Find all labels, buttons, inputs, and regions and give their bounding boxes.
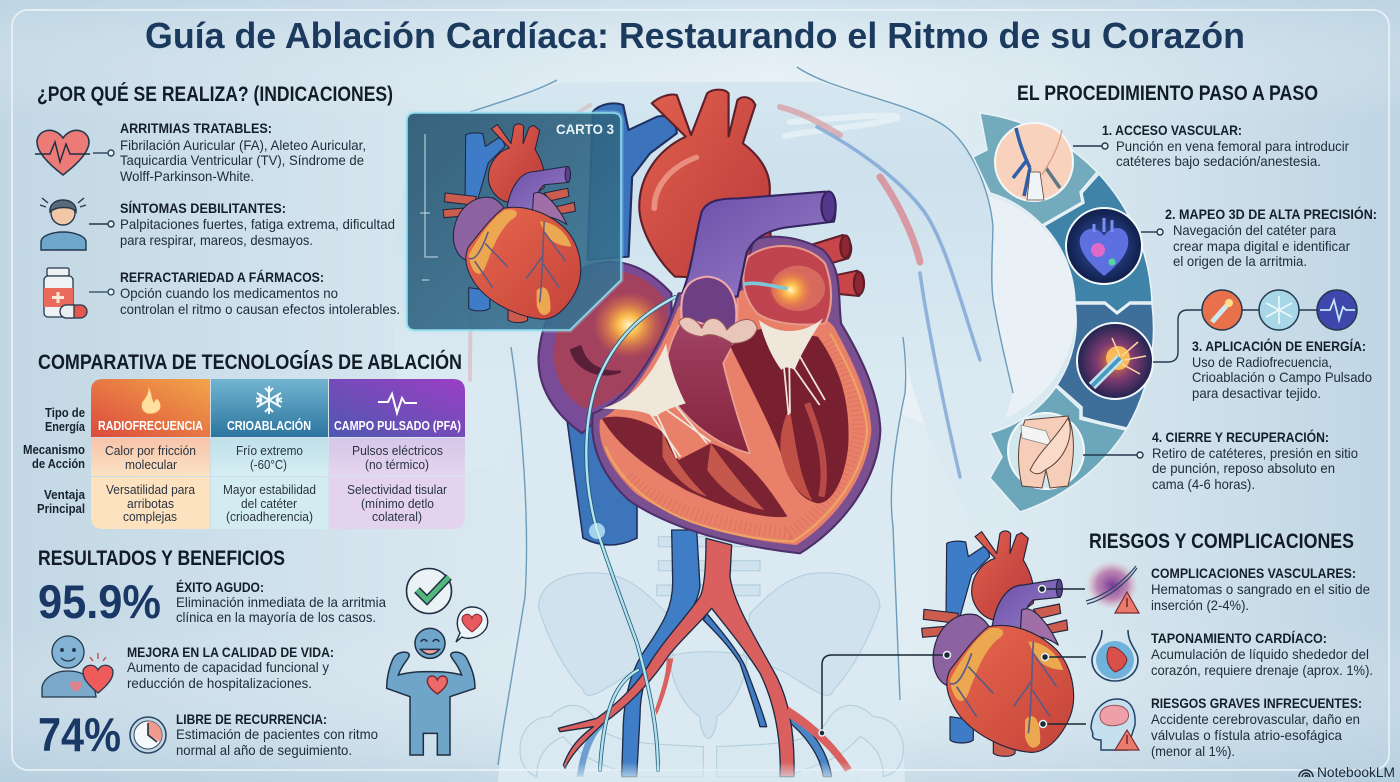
text: vasculares: Hematomas o sangrado en el sitio de	[1151, 581, 1370, 597]
column: radiofrecuencia: Versatilidad para	[106, 483, 195, 497]
text: el origen de la arritmia.	[1173, 253, 1307, 269]
lower vena cava	[567, 420, 637, 545]
column: radiofrecuencia: RADIOFRECUENCIA	[98, 419, 203, 433]
pelvis and spine	[520, 537, 903, 777]
pulmonary root opening	[681, 277, 736, 337]
heart callout connectors	[819, 586, 1086, 736]
text: refractariedad	[120, 269, 400, 317]
title: Guía de Ablación Cardíaca: Restaurando el Ritmo de su Corazón	[145, 15, 1245, 56]
text: sintomas: Palpitaciones fuertes, fatiga extrema, dificultad	[120, 216, 395, 232]
text: taponamiento: corazón, requiere drenaje (aprox. 1%).	[1151, 662, 1373, 678]
column: campo pulsado: (no térmico)	[365, 458, 429, 472]
icon: catheter energy	[1077, 323, 1153, 399]
text: calidad de vida: reducción de hospitalizaciones.	[127, 675, 312, 691]
heading: RIESGOS Y COMPLICACIONES	[1089, 530, 1354, 553]
text: crear mapa digital e identificar	[1173, 238, 1350, 254]
connector and energy icons	[1153, 290, 1357, 362]
text: taponamiento: Acumulación de líquido shededor del	[1151, 646, 1369, 662]
column: radiofrecuencia: arribotas	[127, 497, 174, 511]
text	[1192, 337, 1372, 401]
heading: RESULTADOS Y BENEFICIOS	[38, 547, 285, 570]
text: exito agudo: ÉXITO AGUDO:	[176, 579, 264, 595]
text: cama (4-6 horas).	[1152, 476, 1255, 492]
ring inner light area	[840, 192, 1076, 428]
column: crioablacion: CRIOABLACIÓN	[227, 418, 311, 433]
column: crioablacion	[211, 379, 328, 529]
step 2	[1066, 205, 1377, 284]
icon: check mark	[406, 568, 452, 614]
icon: brain with warning	[1091, 699, 1139, 750]
text: riesgos graves: válvulas o fístula atrio-esofágica	[1151, 727, 1342, 743]
descending vessels	[558, 530, 852, 777]
text: libre de recurrencia	[176, 711, 378, 758]
text: vasculares: inserción (2-4%).	[1151, 597, 1249, 613]
icon: smiling person with heart	[42, 636, 113, 697]
text: catéteres bajo sedación/anestesia.	[1116, 153, 1321, 169]
ring segment 4	[990, 387, 1126, 512]
body silhouette with anatomy background	[393, 67, 1013, 782]
text: sintomas: SÍNTOMAS DEBILITANTES:	[120, 200, 286, 216]
text: libre de recurrencia: LIBRE DE RECURRENCIA:	[176, 711, 327, 727]
chordae right	[759, 318, 825, 415]
text: 3. APLICACIÓN DE ENERGÍA:	[1192, 337, 1366, 354]
column: radiofrecuencia: complejas	[123, 510, 177, 524]
icon: clock	[130, 717, 166, 753]
pulmonary artery	[682, 191, 836, 297]
heart outer wall	[592, 237, 880, 553]
heading: COMPARATIVA DE TECNOLOGÍAS DE ABLACIÓN	[38, 350, 462, 374]
text: refractariedad: Opción cuando los medicamentos no	[120, 285, 338, 301]
tip catheter	[745, 283, 786, 288]
valve cusps	[679, 317, 757, 343]
ring segment 2	[1044, 174, 1152, 312]
watermark: NotebookLM: NotebookLM	[1317, 765, 1395, 780]
table row labels: de Acción	[32, 457, 85, 471]
column: campo pulsado: Pulsos eléctricos	[352, 444, 443, 458]
text: calidad de vida: MEJORA EN LA CALIDAD DE VIDA:	[127, 644, 334, 660]
panel: indications	[35, 83, 400, 318]
column: campo pulsado: Selectividad tisular	[347, 483, 447, 497]
connector	[1141, 229, 1163, 235]
ring segment 3	[1057, 304, 1154, 428]
text: refractariedad: REFRACTARIEDAD A FÁRMACOS:	[120, 269, 324, 285]
ring segment 1	[973, 113, 1097, 225]
text: arritmias: Wolff-Parkinson-White.	[120, 168, 254, 184]
connector	[1083, 452, 1143, 458]
text: exito agudo: Eliminación inmediata de la arritmia	[176, 594, 386, 610]
text: sintomas: para respirar, mareos, desmayos.	[120, 232, 313, 248]
text: 1. ACCESO VASCULAR:	[1102, 122, 1242, 138]
inset: CARTO 3 mapping panel	[407, 113, 621, 330]
icon: groin vascular access	[995, 123, 1073, 201]
column: campo pulsado: CAMPO PULSADO (PFA)	[334, 419, 461, 433]
column: campo pulsado: colateral)	[372, 510, 422, 524]
ablation glow right	[769, 269, 813, 311]
column: radiofrecuencia: molecular	[125, 458, 177, 472]
text: libre de recurrencia: Estimación de pacientes con ritmo	[176, 726, 378, 742]
step 3	[1077, 290, 1372, 401]
outflow column	[666, 293, 750, 453]
table row labels: Principal	[37, 502, 85, 516]
column: crioablacion: (-60°C)	[250, 458, 287, 472]
arm vessels	[470, 105, 980, 477]
column: crioablacion: (crioadherencia)	[226, 510, 313, 524]
icon: medicine bottle	[44, 268, 114, 318]
panel: risks	[819, 530, 1373, 759]
heading: EL PROCEDIMIENTO PASO A PASO	[1017, 82, 1318, 105]
superior vena cava	[587, 103, 677, 260]
icon: heart with ECG	[35, 130, 114, 175]
heading: ¿POR QUÉ SE REALIZA? (INDICACIONES)	[37, 83, 393, 106]
text: refractariedad: controlan el ritmo o causan efectos intolerables.	[120, 301, 400, 317]
column: radiofrecuencia: Calor por fricción	[105, 444, 196, 458]
table row labels: Energía	[45, 420, 86, 434]
text: exito agudo: clínica en la mayoría de los casos.	[176, 609, 376, 625]
column: crioablacion: Frío extremo	[236, 444, 303, 458]
column: campo pulsado: (mínimo detlo	[361, 497, 434, 511]
connector	[1073, 143, 1108, 149]
text: Punción en vena femoral para introducir	[1116, 138, 1349, 154]
icon: speech bubble heart	[456, 607, 488, 642]
text: 4. CIERRE Y RECUPERACIÓN:	[1152, 428, 1329, 445]
text: Crioablación o Campo Pulsado	[1192, 369, 1372, 385]
text: arritmias	[120, 120, 366, 184]
icon: tamponade drop	[1092, 630, 1138, 681]
column: radiofrecuencia	[91, 379, 210, 529]
icon: compression	[1008, 413, 1084, 489]
table row labels: Ventaja	[44, 488, 86, 502]
icon: hematoma warning	[1086, 561, 1139, 613]
text: Retiro de catéteres, presión en sitio	[1152, 445, 1358, 461]
catheter	[586, 297, 675, 770]
text: riesgos graves	[1151, 695, 1362, 759]
icon: person with symptoms	[40, 198, 114, 250]
stat 95.9%: 95.9%	[38, 575, 161, 628]
text: taponamiento: TAPONAMIENTO CARDÍACO:	[1151, 630, 1327, 646]
icon: 3D map heart	[1066, 208, 1142, 284]
aortic arch	[639, 90, 771, 280]
label: CARTO 3: CARTO 3	[556, 122, 614, 137]
text: calidad de vida: Aumento de capacidad funcional y	[127, 659, 329, 675]
text: arritmias: Fibrilación Auricular (FA), Aleteo Auricular,	[120, 137, 366, 153]
table row labels: Tipo de	[45, 406, 85, 420]
column: campo pulsado	[329, 379, 465, 529]
left ventricle cavity	[602, 417, 787, 517]
text: riesgos graves: Accidente cerebrovascular, daño en	[1151, 711, 1360, 727]
text	[1165, 205, 1377, 269]
column: crioablacion: del catéter	[241, 497, 297, 511]
panel: technology comparison	[23, 350, 465, 529]
step 1	[995, 122, 1349, 201]
text: riesgos graves: (menor al 1%).	[1151, 743, 1235, 759]
text: libre de recurrencia: normal al año de seguimiento.	[176, 742, 352, 758]
text: calidad de vida	[127, 644, 334, 691]
text: taponamiento	[1151, 630, 1373, 678]
table row labels	[23, 406, 86, 516]
text: Navegación del catéter para	[1173, 222, 1336, 238]
bottom fade	[560, 762, 860, 782]
stat 74%: 74%	[38, 708, 121, 761]
text	[1152, 428, 1358, 492]
text: Uso de Radiofrecuencia,	[1192, 354, 1332, 370]
chordae left	[602, 343, 711, 458]
text: riesgos graves: RIESGOS GRAVES INFRECUENTES:	[1151, 695, 1362, 711]
risk heart	[922, 531, 1074, 756]
myocardium	[599, 287, 871, 545]
ablation glow left	[593, 292, 664, 358]
main heart illustration	[539, 90, 880, 553]
inset heart	[443, 124, 581, 323]
column: crioablacion: Mayor estabilidad	[223, 483, 316, 497]
table row labels: Mecanismo	[23, 443, 85, 457]
text	[1102, 122, 1349, 169]
left chamber	[539, 262, 671, 433]
text: de punción, reposo absoluto en	[1152, 460, 1335, 476]
text: exito agudo	[176, 579, 386, 625]
text: arritmias: ARRITMIAS TRATABLES:	[120, 120, 272, 136]
text: para desactivar tejido.	[1192, 385, 1321, 401]
text: 2. MAPEO 3D DE ALTA PRECISIÓN:	[1165, 205, 1377, 222]
text: arritmias: Taquicardia Ventricular (TV), Síndrome de	[120, 152, 364, 168]
step 4	[1008, 413, 1358, 492]
right ventricle cavity	[730, 328, 849, 503]
panel: procedure	[973, 82, 1377, 512]
panel: results	[38, 547, 488, 761]
text: vasculares: COMPLICACIONES VASCULARES:	[1151, 565, 1356, 581]
upper right chamber	[743, 246, 831, 325]
icon: happy person flexing	[387, 628, 475, 755]
text: vasculares	[1151, 565, 1370, 613]
pulmonary veins	[811, 235, 864, 296]
text: sintomas	[120, 200, 395, 248]
